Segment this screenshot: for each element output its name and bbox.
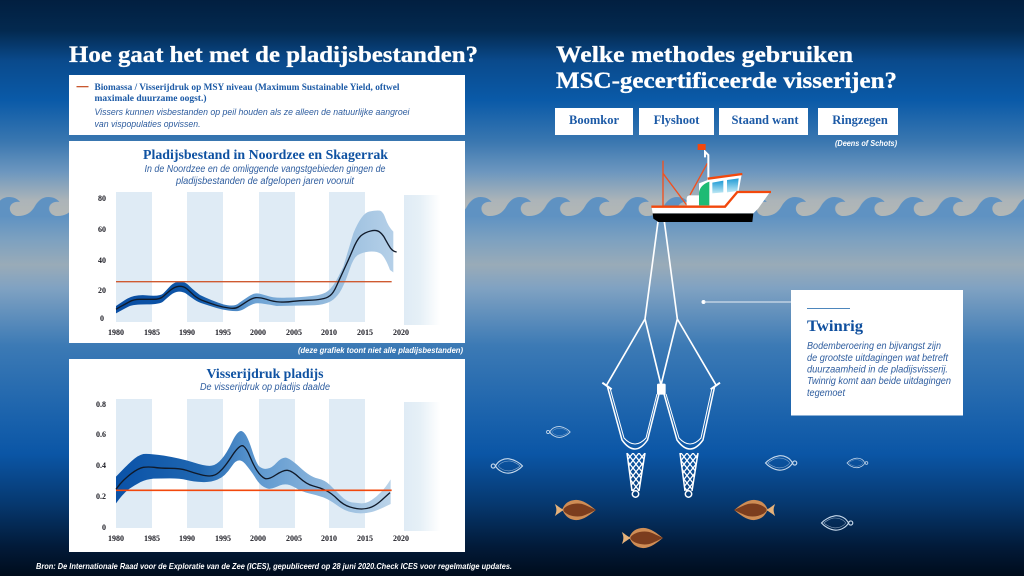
x axis labels: 1990 <box>179 534 195 543</box>
x axis labels: 1995 <box>215 534 231 543</box>
y axis labels: 0.2 <box>96 492 106 501</box>
x axis labels: 2010 <box>321 534 337 543</box>
x axis labels: 1990 <box>179 328 195 337</box>
x axis labels: 1985 <box>144 328 160 337</box>
button: Staand want: Staand want <box>731 113 799 127</box>
y axis labels <box>98 194 106 323</box>
y axis labels: 20 <box>98 286 106 295</box>
line chart: biomass <box>116 210 397 313</box>
period bands <box>116 192 440 325</box>
y axis labels: 0.8 <box>96 400 106 409</box>
note: Deens of Schots: (Deens of Schots) <box>835 139 897 148</box>
chart subtitle: De visserijdruk op pladijs daalde <box>200 382 330 393</box>
period bands <box>116 399 440 531</box>
x axis labels: 1980 <box>108 328 124 337</box>
y axis labels: 60 <box>98 225 106 234</box>
panel: pladijsbestand chart <box>69 141 465 343</box>
y axis labels: 0.6 <box>96 430 106 439</box>
x axis labels: 2000 <box>250 328 266 337</box>
icon: outline plaice 1 <box>547 427 570 437</box>
x axis labels: 1980 <box>108 534 124 543</box>
x axis labels: 2015 <box>357 328 373 337</box>
icon: outline plaice 5 <box>822 516 853 530</box>
icon: brown plaice bottom <box>623 528 663 548</box>
y axis labels: 0 <box>100 314 104 323</box>
button: Flyshoot <box>639 108 714 135</box>
callout body: Bodemberoering en bijvangst zijn <box>807 341 941 352</box>
x axis labels: 2015 <box>357 534 373 543</box>
y axis labels: 80 <box>98 194 106 203</box>
callout body: Twinrig komt aan beide uitdagingen <box>807 376 951 387</box>
button: Flyshoot: Flyshoot <box>654 113 700 127</box>
x axis labels: 1995 <box>215 328 231 337</box>
panel: visserijdruk chart <box>69 359 465 552</box>
connector line to callout <box>702 300 791 304</box>
chart note: (deze grafiek toont niet alle pladijsbestanden) <box>298 345 463 355</box>
icon: brown plaice left <box>556 500 596 520</box>
chart title: Visserijdruk pladijs <box>206 366 324 381</box>
x axis labels: 2005 <box>286 328 302 337</box>
y axis labels <box>96 400 106 532</box>
chart subtitle: In de Noordzee en de omliggende vangstgebieden gingen de <box>144 164 386 175</box>
legend line <box>76 86 88 87</box>
icon: outline plaice 3 <box>766 456 797 470</box>
callout body: duurzaamheid in de pladijsvisserij. <box>807 364 948 376</box>
y axis labels: 0.4 <box>96 461 106 470</box>
x axis labels: 2005 <box>286 534 302 543</box>
heading: left: Hoe gaat het met de pladijsbestanden? <box>69 42 478 67</box>
icon: fishing boat <box>651 144 771 222</box>
legend label: maximale duurzame oogst.) <box>94 93 206 104</box>
heading: right: Welke methodes gebruiken <box>556 42 853 67</box>
callout: Twinrig <box>791 290 963 416</box>
callout body: de grootste uitdagingen wat betreft <box>807 353 949 364</box>
icon: outline plaice 2 <box>491 459 522 473</box>
icon: twin rig nets <box>602 222 720 497</box>
icon: outline plaice 4 <box>847 458 868 468</box>
x axis labels: 2020 <box>393 328 409 337</box>
chart title: Pladijsbestand in Noordzee en Skagerrak <box>143 147 388 162</box>
icon: brown plaice right <box>734 500 774 520</box>
heading: right: MSC-gecertificeerde visserijen? <box>556 68 897 93</box>
button: Ringzegen: Ringzegen <box>832 113 888 127</box>
callout body: tegemoet <box>807 388 846 399</box>
x axis labels <box>108 328 409 337</box>
y axis labels: 40 <box>98 256 106 265</box>
x axis labels <box>108 534 409 543</box>
chart subtitle: pladijsbestanden de afgelopen jaren vooruit <box>175 176 355 187</box>
callout title: Twinrig <box>807 318 863 335</box>
panel: legend <box>69 75 465 135</box>
line chart: fishing pressure <box>116 431 392 513</box>
x axis labels: 2020 <box>393 534 409 543</box>
source footer: Bron: De Internationale Raad voor de Exploratie van de Zee (ICES), gepubliceerd op 28 juni 2020.Check ICES voor regelmatige updates. <box>36 561 512 571</box>
button: Boomkor: Boomkor <box>569 113 619 127</box>
x axis labels: 2000 <box>250 534 266 543</box>
y axis labels: 0 <box>102 523 106 532</box>
button: Boomkor <box>555 108 633 135</box>
legend label: Biomassa / Visserijdruk op MSY niveau (Maximum Sustainable Yield, oftwel <box>94 82 400 93</box>
x axis labels: 2010 <box>321 328 337 337</box>
button: Ringzegen <box>818 108 898 135</box>
method buttons <box>555 108 898 135</box>
legend explanation: Vissers kunnen visbestanden op peil houden als ze alleen de natuurlijke aangroei <box>94 107 410 118</box>
legend explanation: van vispopulaties opvissen. <box>94 119 200 130</box>
x axis labels: 1985 <box>144 534 160 543</box>
button: Staand want <box>719 108 808 135</box>
